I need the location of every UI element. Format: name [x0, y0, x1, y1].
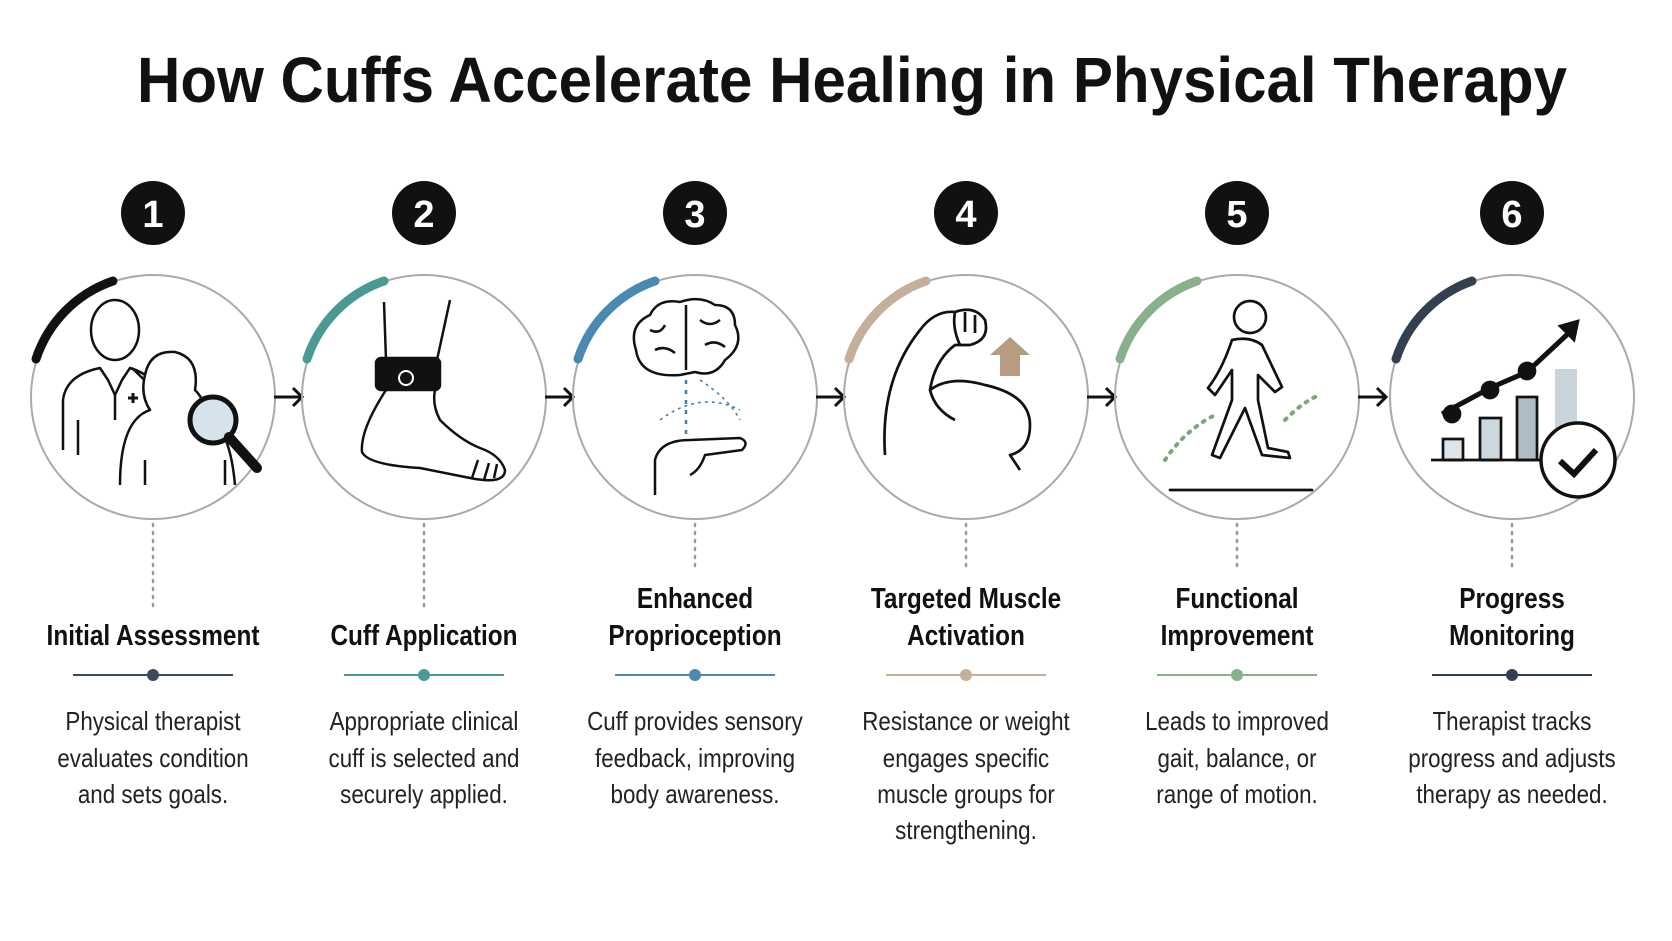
progress arc 2 [307, 281, 384, 359]
description 3 [587, 707, 804, 809]
dotted connectors [153, 524, 1512, 606]
label: Targeted Muscle Activation: Targeted Muscle [871, 582, 1061, 614]
number badge 6 [1480, 181, 1544, 245]
description 2: cuff is selected and [329, 744, 519, 773]
label: Functional Improvement: Improvement [1161, 619, 1314, 651]
description 1: evaluates condition [57, 744, 249, 773]
progress arc 1 [36, 281, 113, 359]
description 1 [57, 707, 249, 809]
progress arc 4 [849, 281, 926, 359]
description 5: gait, balance, or [1157, 744, 1317, 773]
label: Enhanced Proprioception [608, 582, 782, 651]
icon: brain and hand [634, 299, 746, 495]
circle 3 [573, 275, 817, 519]
description 2: securely applied. [340, 780, 508, 809]
description 6 [1408, 707, 1616, 809]
number badge 2 [392, 181, 456, 245]
progress arc 5 [1120, 281, 1197, 359]
icon: therapist and patient with magnifier [63, 300, 257, 485]
label: Functional Improvement: Functional [1175, 582, 1299, 614]
number badge 2: 2 [413, 194, 435, 236]
title: How Cuffs Accelerate Healing in Physical Therapy [137, 44, 1567, 116]
icon: progress chart with check [1431, 321, 1615, 497]
description 2: Appropriate clinical [330, 707, 518, 736]
number badge 4 [934, 181, 998, 245]
number badge 1: 1 [142, 194, 164, 236]
description 2 [329, 707, 519, 809]
description 5: Leads to improved [1145, 707, 1329, 736]
circle 5 [1115, 275, 1359, 519]
icon: flexed arm with arrow [884, 310, 1030, 470]
description 3: body awareness. [611, 780, 779, 809]
label: Initial Assessment: Initial Assessment [47, 619, 260, 651]
icon: ankle cuff [362, 300, 505, 480]
number badge 6: 6 [1501, 194, 1523, 236]
label: Targeted Muscle Activation: Activation [907, 619, 1025, 651]
description 5: range of motion. [1156, 780, 1318, 809]
description 4: engages specific [883, 744, 1049, 773]
description 1: and sets goals. [78, 780, 228, 809]
dividers with dots [73, 669, 1592, 681]
number badge 5: 5 [1226, 194, 1248, 236]
step 1 [31, 181, 275, 519]
number badge 5 [1205, 181, 1269, 245]
label: Enhanced Proprioception: Proprioception [608, 619, 782, 651]
description 4 [862, 707, 1070, 845]
circle 6 [1390, 275, 1634, 519]
description 3: feedback, improving [595, 744, 795, 773]
description 6: progress and adjusts [1408, 744, 1616, 773]
circle 1 [31, 275, 275, 519]
label: Cuff Application: Cuff Application [330, 619, 518, 651]
arrow 1 to 2 [274, 388, 302, 406]
circle 4 [844, 275, 1088, 519]
progress arc 6 [1396, 281, 1472, 359]
progress arc 3 [578, 281, 655, 359]
step 3 [573, 181, 817, 519]
description 4: muscle groups for [877, 780, 1055, 809]
label: Progress Monitoring [1449, 582, 1575, 651]
description 4: Resistance or weight [862, 707, 1070, 736]
step 5 [1115, 181, 1359, 519]
arrow 5 to 6 [1358, 388, 1386, 406]
description 3: Cuff provides sensory [587, 707, 804, 736]
label: Targeted Muscle Activation [871, 582, 1061, 651]
label: Progress Monitoring: Progress [1459, 582, 1565, 614]
arrow 4 to 5 [1087, 388, 1115, 406]
number badge 3 [663, 181, 727, 245]
description 4: strengthening. [895, 816, 1037, 845]
label: Enhanced Proprioception: Enhanced [637, 582, 753, 614]
description 6: therapy as needed. [1416, 780, 1608, 809]
icon: walking figure [1165, 301, 1320, 490]
number badge 3: 3 [684, 194, 706, 236]
number badge 1 [121, 181, 185, 245]
arrow 3 to 4 [816, 388, 844, 406]
circle 2 [302, 275, 546, 519]
description 1: Physical therapist [65, 707, 241, 736]
arrow 2 to 3 [545, 388, 573, 406]
label: Functional Improvement [1161, 582, 1314, 651]
step 4 [844, 181, 1088, 519]
description 6: Therapist tracks [1433, 707, 1591, 736]
label: Progress Monitoring: Monitoring [1449, 619, 1575, 651]
description 5 [1145, 707, 1329, 809]
step 2 [302, 181, 546, 519]
step 6 [1390, 181, 1634, 519]
number badge 4: 4 [955, 194, 977, 236]
